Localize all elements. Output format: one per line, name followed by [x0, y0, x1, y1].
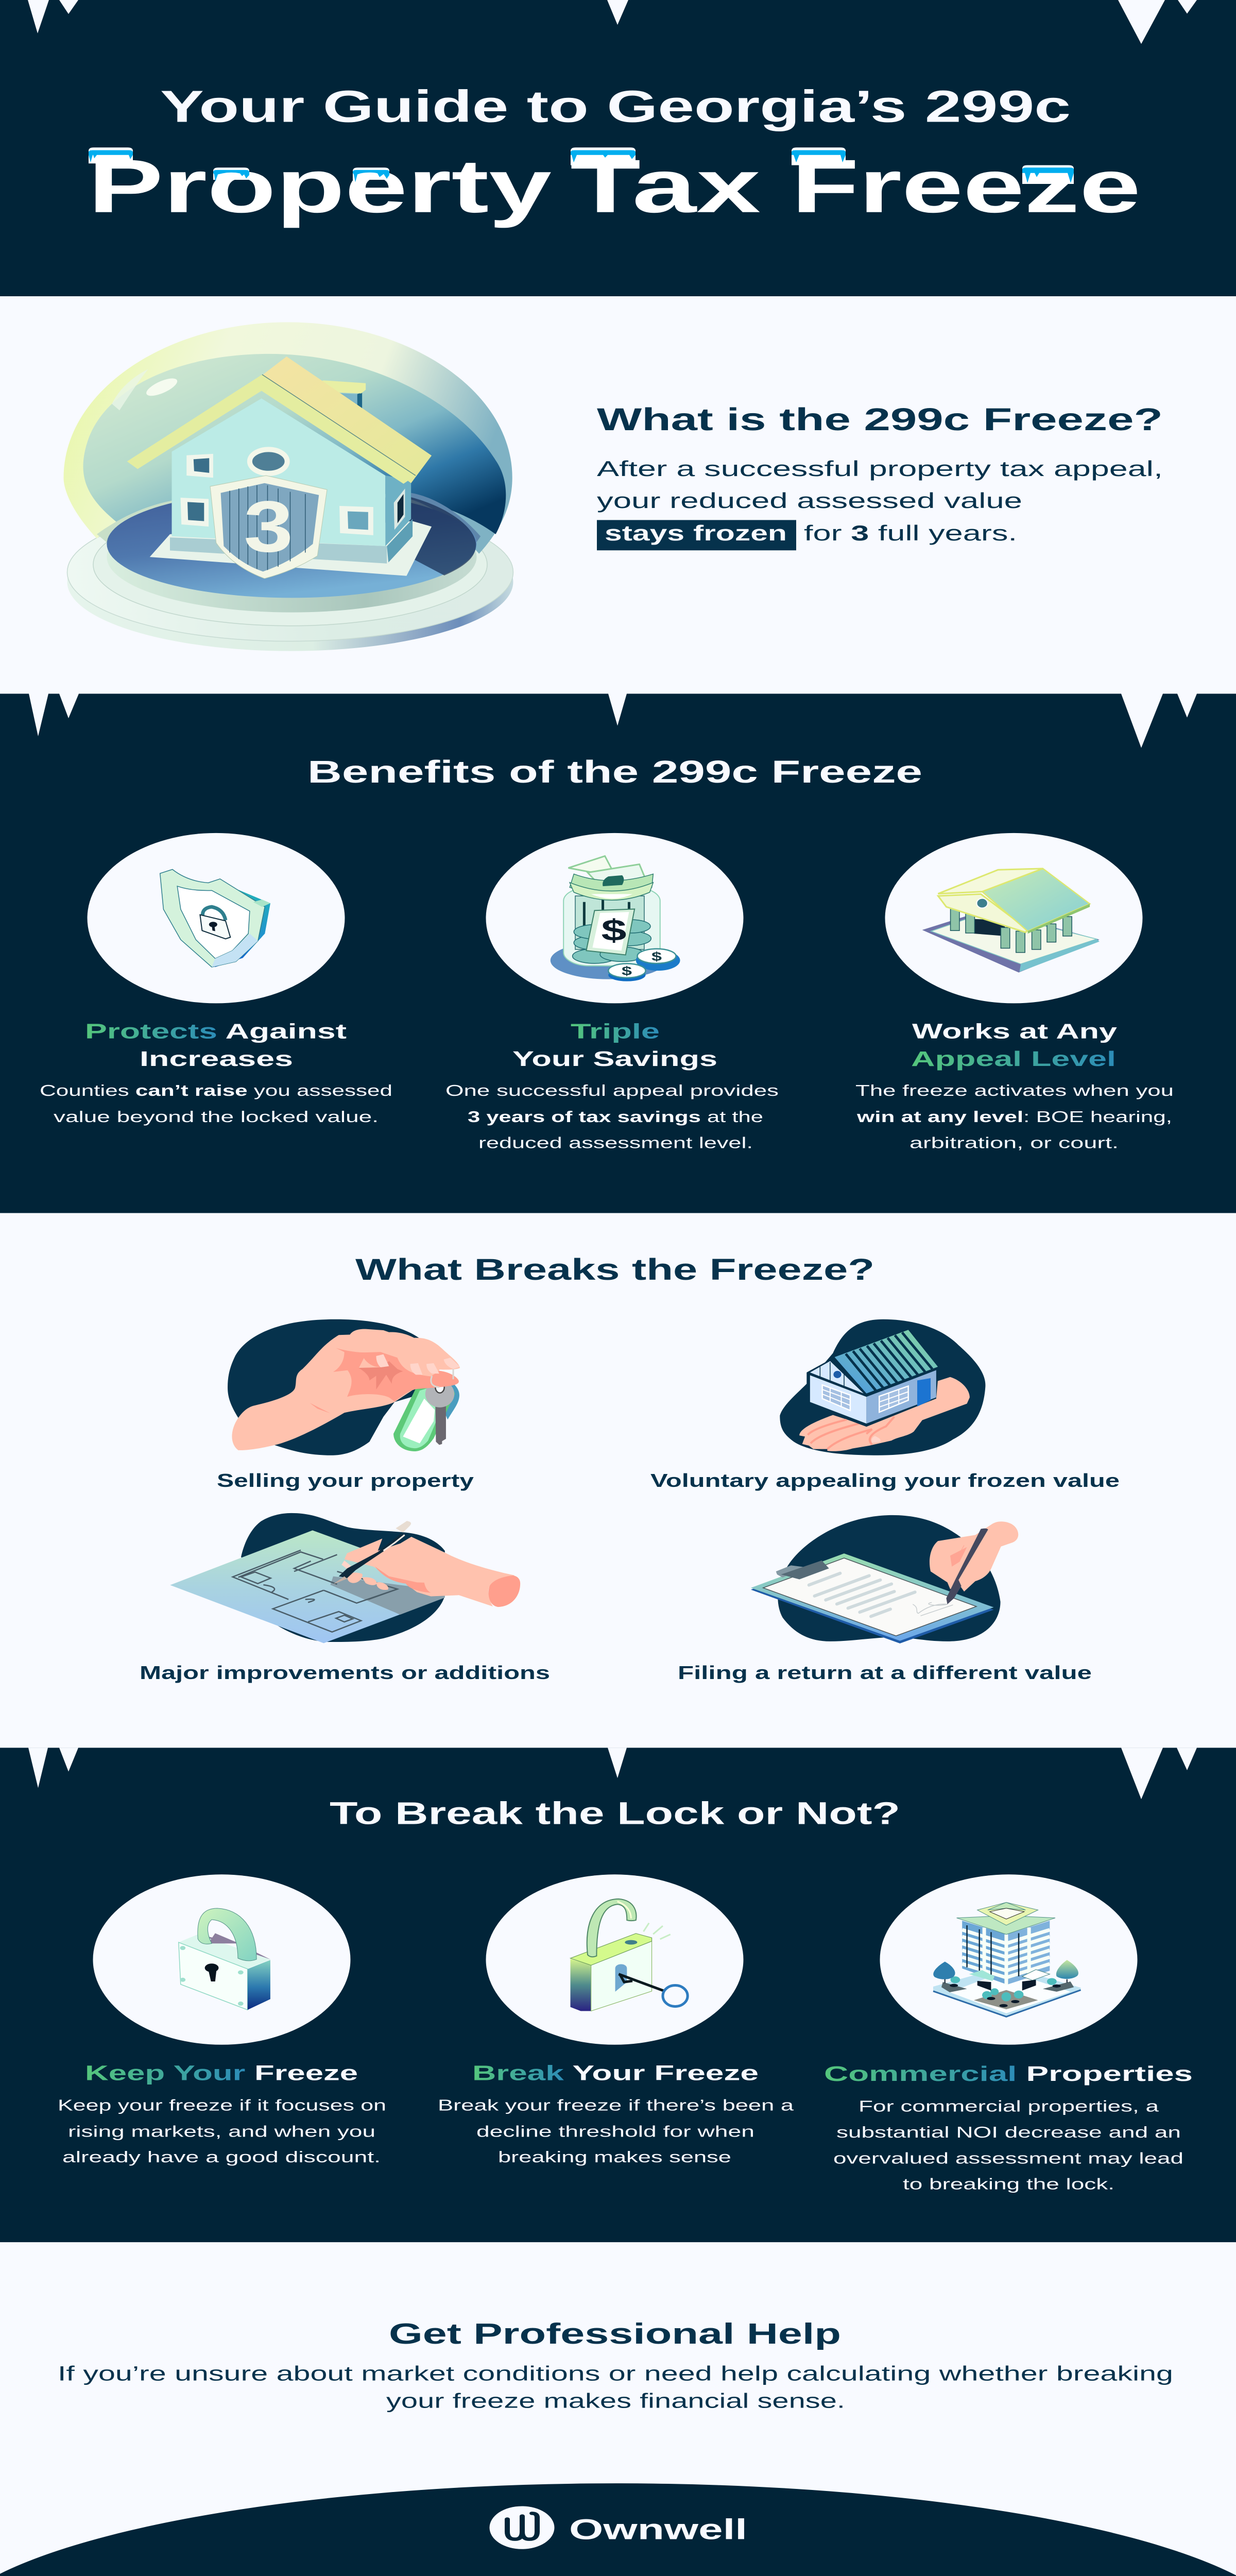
text block: benefit 1 [40, 1082, 392, 1126]
text block: keep: rising markets, and when you [68, 2123, 375, 2140]
heading: what is the 299c freeze: What is the 299c Freeze? [597, 402, 1163, 437]
text block: break: decline threshold for when [476, 2123, 754, 2140]
heading: get professional help: Get Professional Help [389, 2317, 841, 2350]
text block: benefit 1: Counties can’t raise you assessed [40, 1082, 392, 1099]
panel: get professional help [0, 2242, 1236, 2576]
illustration: house in open hand [780, 1319, 985, 1455]
text block: benefit 3: The freeze activates when you [855, 1082, 1174, 1099]
shield with number 3 [210, 476, 327, 579]
text block: get professional help: your freeze makes financial sense. [386, 2389, 845, 2412]
item: voluntary appealing [650, 1319, 1120, 1491]
illustration: hand holding keys [228, 1319, 460, 1455]
item: major improvements [140, 1513, 550, 1683]
plate [107, 490, 476, 598]
icicles: header [28, 0, 1197, 44]
house slab and foundation [150, 519, 432, 576]
item: selling your property [217, 1319, 474, 1491]
label: voluntary appealing: Voluntary appealing your frozen value [650, 1470, 1120, 1491]
house [127, 357, 432, 579]
benefit 2: triple your savings [445, 833, 779, 1151]
subheading: works at any appeal level: Appeal Level [911, 1047, 1116, 1071]
subheading: protects against increases: Protects Against [85, 1020, 347, 1043]
text block: explanation: your reduced assessed value [597, 489, 1022, 513]
house walls [172, 398, 385, 546]
text block: benefit 2: reduced assessment level. [478, 1134, 753, 1151]
subheading: works at any appeal level [911, 1020, 1117, 1071]
text block: commercial: to breaking the lock. [903, 2176, 1114, 2193]
text block: explanation: After a successful property tax appeal, [597, 457, 1163, 481]
text block: commercial: For commercial properties, a [859, 2098, 1159, 2115]
icon: office building [933, 1902, 1081, 2016]
title line 2: Tax [570, 144, 761, 228]
text block: benefit 3 [855, 1082, 1174, 1151]
text block: benefit 2: One successful appeal provides [445, 1082, 779, 1099]
panel: header [0, 0, 1236, 296]
icicles: break the lock [28, 1748, 1197, 1799]
benefit 1: protects against increases: Increases [140, 1047, 293, 1071]
shield with number 3: 3 [244, 486, 293, 567]
glass sphere [63, 322, 512, 554]
illustration: snow globe with house and shield [63, 322, 513, 651]
text block: commercial: substantial NOI decrease and an [836, 2124, 1181, 2141]
illustration: hand drawing on blueprint [170, 1513, 520, 1643]
icon: closed padlock [179, 1908, 270, 2010]
logo: Ownwell [489, 2506, 747, 2549]
panel: benefits [0, 694, 1236, 1213]
icon: shield with padlock [160, 869, 270, 967]
logo: Ownwell: Ownwell [569, 2514, 747, 2546]
text block: commercial [833, 2098, 1183, 2193]
text block: keep [58, 2097, 386, 2166]
panel: what breaks the freeze [0, 1213, 1236, 1748]
icicles: benefits [29, 694, 1197, 748]
text block: keep: already have a good discount. [62, 2148, 381, 2166]
benefit 3: works at any appeal level [855, 833, 1174, 1151]
panel: to break the lock or not [0, 1748, 1236, 2242]
option 3: commercial properties [824, 1874, 1193, 2193]
icon: money jar with coins: $ [651, 950, 662, 963]
globe base [67, 502, 513, 651]
label: major improvements: Major improvements or additions [140, 1663, 550, 1683]
subheading: triple your savings: Triple [571, 1020, 660, 1043]
subheading: triple your savings [512, 1020, 717, 1071]
text block: commercial: overvalued assessment may lead [833, 2150, 1183, 2167]
benefit 1: protects against increases [40, 833, 392, 1126]
text block: benefit 3: arbitration, or court. [909, 1134, 1119, 1151]
chimney [310, 380, 366, 428]
text block: benefit 2: 3 years of tax savings at the [468, 1109, 763, 1126]
heading: what breaks the freeze: What Breaks the Freeze? [355, 1252, 874, 1286]
title line 2: Freeze [792, 144, 1141, 228]
option 1: keep your freeze [58, 1874, 386, 2166]
text block: keep: Keep your freeze if it focuses on [58, 2097, 386, 2114]
text block: benefit 3: win at any level: BOE hearing, [856, 1109, 1172, 1126]
padlock on shield [200, 907, 230, 939]
text block: explanation [597, 457, 1163, 550]
text block: benefit 2 [445, 1082, 779, 1151]
roof [127, 357, 432, 484]
label: selling your property: Selling your property [217, 1470, 474, 1491]
illustration: hand signing clipboard [751, 1515, 1018, 1643]
subheading: triple your savings: Your Savings [512, 1047, 717, 1071]
title line 2: Property [88, 144, 552, 228]
text block: benefit 1: value beyond the locked value. [54, 1109, 379, 1126]
icon: money jar with coins: $ [622, 964, 632, 978]
text block: explanation: for 3 full years. [804, 521, 1017, 545]
panel: what is the 299c freeze [0, 296, 1236, 694]
round window [250, 449, 287, 473]
subheading: works at any appeal level: Works at Any [912, 1020, 1117, 1043]
option 2: break your freeze [438, 1874, 794, 2166]
subheading: break your freeze: Break Your Freeze [472, 2061, 759, 2085]
subheading: keep your freeze: Keep Your Freeze [85, 2061, 358, 2085]
footer arc [0, 2483, 1236, 2576]
snow caps on title letters [89, 147, 1074, 184]
icon: open padlock with key [571, 1899, 688, 2011]
text block: break: Break your freeze if there’s been a [438, 2097, 794, 2114]
icon: courthouse [922, 869, 1100, 973]
text block: break: breaking makes sense [498, 2148, 731, 2166]
heading: benefits: Benefits of the 299c Freeze [307, 754, 922, 789]
icon: money jar with coins: $ [602, 913, 626, 947]
item: filing a return [678, 1515, 1092, 1683]
highlight: stays frozen: stays frozen [605, 521, 787, 545]
text block: get professional help [58, 2362, 1173, 2412]
label: filing a return: Filing a return at a different value [678, 1663, 1092, 1683]
heading: to break the lock or not: To Break the Lock or Not? [330, 1795, 900, 1831]
subheading: commercial properties: Commercial Properties [824, 2062, 1193, 2086]
title line 1: Your Guide to Georgia’s 299c [160, 81, 1071, 131]
windows [181, 454, 405, 535]
icon: money jar with coins [551, 856, 680, 981]
text block: get professional help: If you’re unsure about market conditions or need help calculating whether breaking [58, 2362, 1173, 2385]
text block: break [438, 2097, 794, 2166]
